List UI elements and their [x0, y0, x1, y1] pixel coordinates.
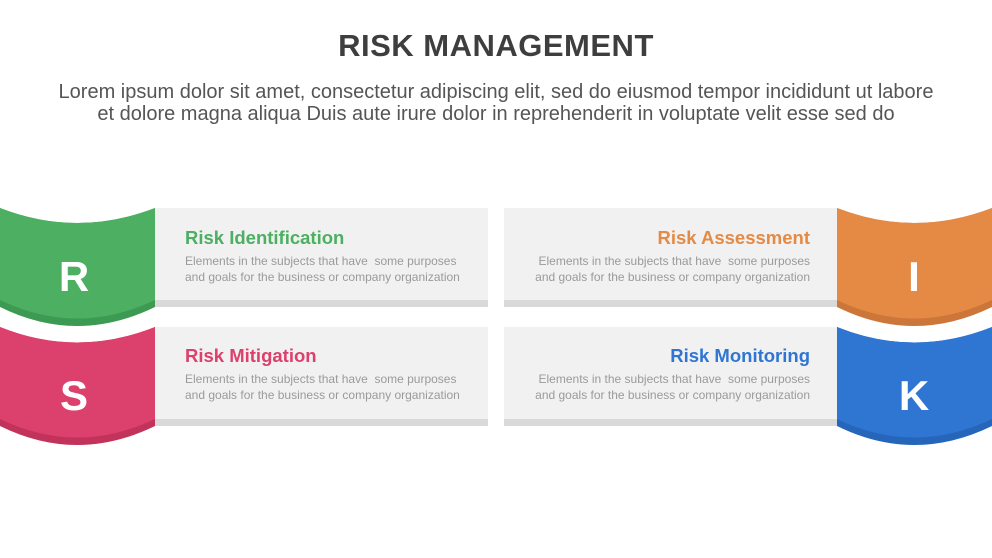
title: RISK MANAGEMENT — [338, 28, 654, 63]
banner: I orange: I — [908, 253, 920, 300]
banner: K blue: K — [899, 372, 929, 419]
text: risk assessment — [535, 227, 810, 284]
panel: assessment box — [504, 208, 837, 307]
subtitle: et dolore magna aliqua Duis aute irure dolor in reprehenderit in voluptate velit esse sed do — [97, 103, 895, 125]
text: risk mitigation — [185, 345, 460, 402]
text: risk mitigation: Elements in the subjects that have some purposes — [185, 372, 456, 386]
banner: R green: R — [59, 253, 89, 300]
banner: K blue — [837, 327, 992, 445]
banner: I orange — [837, 208, 992, 326]
subtitle: Lorem ipsum dolor sit amet, consectetur adipiscing elit, sed do eiusmod tempor incididunt ut labore — [59, 81, 933, 103]
panel: monitoring box — [504, 327, 837, 426]
text: risk assessment: Elements in the subjects that have some purposes — [539, 254, 810, 268]
text: risk identification: and goals for the business or company organization — [185, 270, 460, 284]
text: risk mitigation: and goals for the business or company organization — [185, 388, 460, 402]
text: risk monitoring — [535, 345, 810, 402]
text: risk monitoring: Risk Monitoring — [670, 345, 810, 366]
text: risk monitoring: Elements in the subjects that have some purposes — [539, 372, 810, 386]
subtitle — [59, 81, 933, 125]
banner: S pink — [0, 327, 155, 445]
text: risk identification: Elements in the subjects that have some purposes — [185, 254, 456, 268]
text: risk mitigation: Risk Mitigation — [185, 345, 317, 366]
text: risk identification: Risk Identification — [185, 227, 344, 248]
banner: R green — [0, 208, 155, 326]
panel: identification box — [155, 208, 488, 307]
text: risk assessment: and goals for the business or company organization — [535, 270, 810, 284]
text: risk assessment: Risk Assessment — [657, 227, 810, 248]
text: risk identification — [185, 227, 460, 284]
panel: mitigation box — [155, 327, 488, 426]
banner: S pink: S — [60, 372, 88, 419]
text: risk monitoring: and goals for the business or company organization — [535, 388, 810, 402]
